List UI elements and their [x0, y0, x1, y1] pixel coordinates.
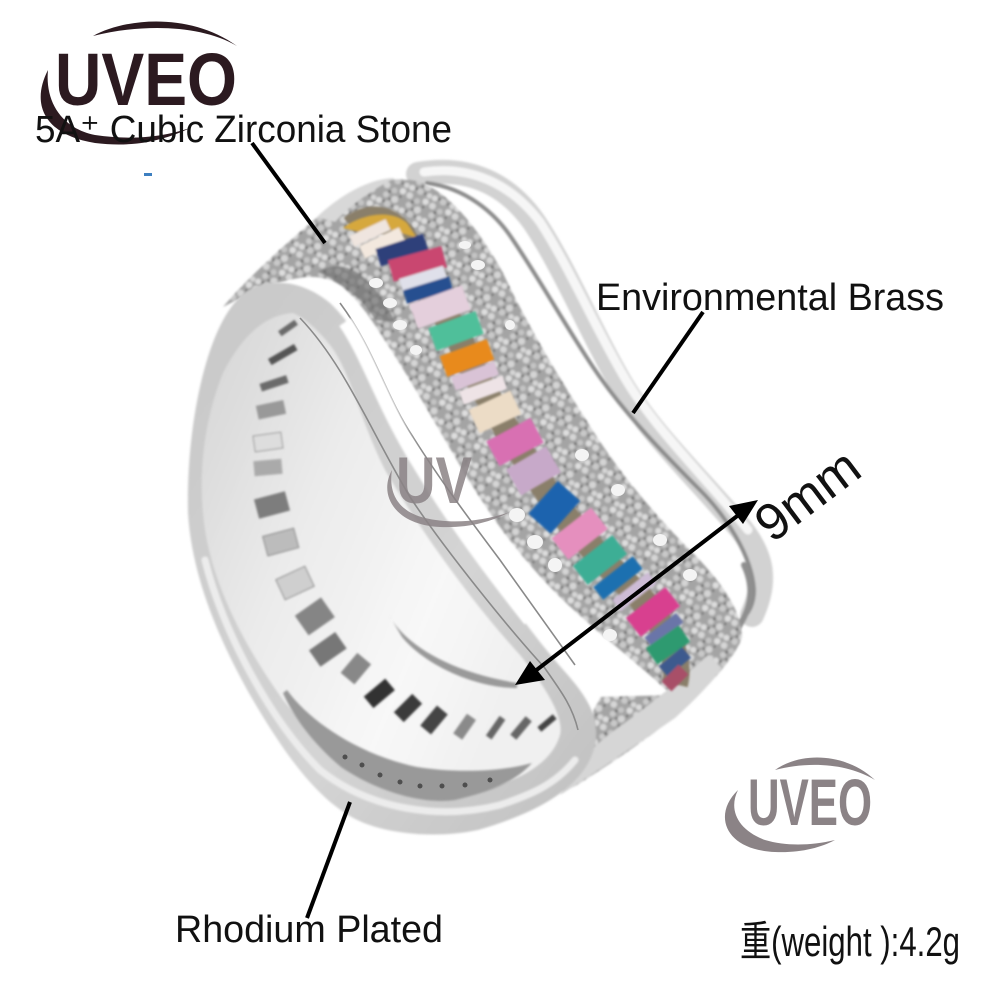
logo swoosh lower: [725, 790, 835, 852]
inner ring surface: [202, 313, 561, 790]
center watermark logo: [387, 443, 510, 527]
arrow: rhodium leader line: [307, 802, 350, 918]
bottom right logo: [725, 758, 875, 852]
watermark swoosh: [387, 470, 510, 527]
inner band slots: [253, 320, 557, 740]
logo wordmark: UVEO: [748, 765, 872, 839]
lower inner slot: [283, 690, 532, 801]
gold channel: [352, 219, 676, 684]
watermark letters: UV: [396, 443, 472, 517]
logo swoosh lower: [41, 70, 190, 145]
rainbow baguette stones: [343, 215, 691, 691]
logo swoosh arc: [775, 758, 875, 780]
rim contour lines: [300, 303, 578, 730]
top logo: [41, 21, 237, 145]
label: Rhodium Plated: Rhodium Plated: [175, 909, 443, 951]
lower slot stones: [342, 754, 492, 788]
logo wordmark UVEO: UVEO: [55, 38, 237, 121]
back band: environmental brass: [418, 171, 761, 632]
loose round diamonds: [369, 241, 697, 641]
ring photo illustration: [188, 171, 761, 834]
arrow: zirconia leader line: [252, 143, 325, 243]
front rim: rhodium plated: [188, 283, 596, 834]
rim highlight: [345, 322, 530, 620]
label: 9mm: 9mm: [744, 438, 872, 554]
small blue speck: [144, 173, 152, 176]
arrow: brass leader line: [633, 312, 703, 413]
upper inner slot: [389, 615, 517, 688]
logo swoosh arc: [93, 21, 237, 46]
dimension arrow: 9mm: [515, 500, 758, 685]
pave diamond band: [223, 178, 742, 795]
label: 5A+ Cubic Zirconia Stone: 5A⁺ Cubic Zirconia Stone: [35, 109, 452, 151]
label: Environmental Brass: Environmental Brass: [596, 277, 944, 319]
